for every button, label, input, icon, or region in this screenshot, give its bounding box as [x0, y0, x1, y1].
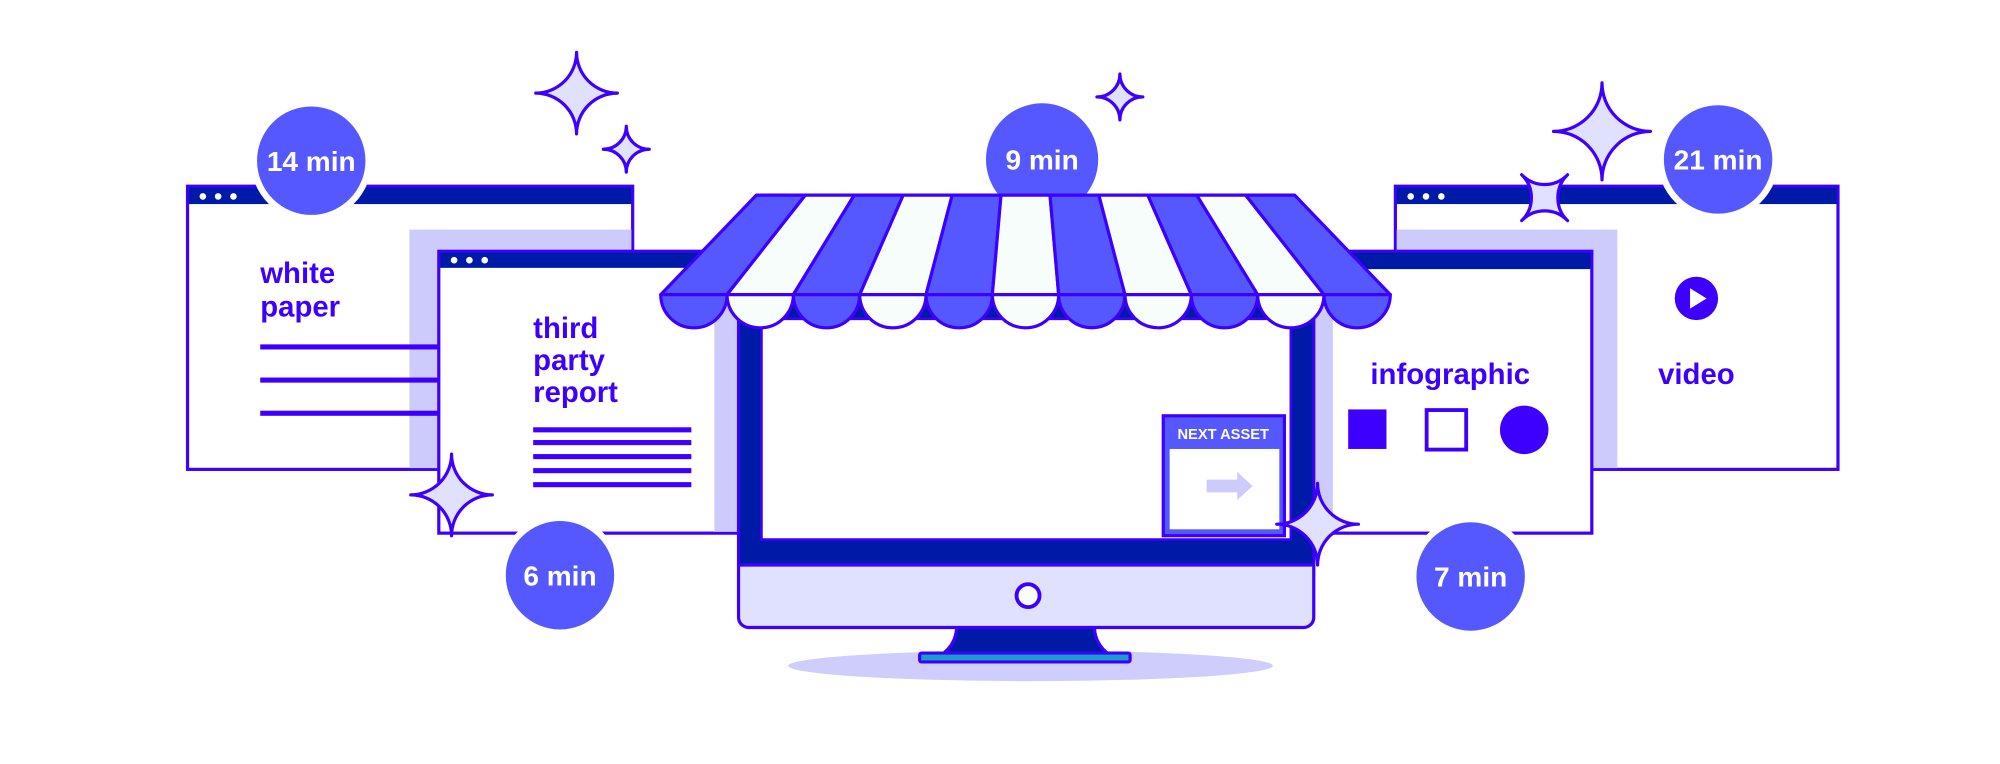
badge: 9 min: 9 min: [1005, 145, 1079, 176]
panel: video window: [1395, 186, 1838, 469]
icon: arrow: [1207, 472, 1253, 500]
panel: third party report window: report: [533, 376, 618, 409]
text: third party report: third: [533, 312, 598, 345]
badge: 21 min: [1661, 102, 1775, 217]
text: infographic: infographic: [1370, 358, 1530, 391]
badge: 7 min: 7 min: [1434, 562, 1507, 593]
awning: [661, 195, 1390, 328]
text: video: video: [1658, 358, 1735, 391]
panel: third party report window: [439, 251, 745, 533]
next asset box: [1163, 416, 1284, 536]
panel: white paper window: [188, 186, 633, 469]
panel: infographic window: [1301, 251, 1592, 533]
monitor: [739, 301, 1314, 662]
badge: 9 min: [986, 103, 1098, 216]
badge: 21 min: 21 min: [1674, 145, 1763, 176]
badge: 14 min: [254, 103, 369, 218]
panel: third party report window: party: [533, 344, 606, 377]
badge: 14 min: 14 min: [267, 146, 356, 177]
panel: white paper window: paper: [260, 290, 340, 323]
sparkles: [411, 52, 1650, 565]
next asset box: NEXT ASSET: [1177, 427, 1269, 443]
badge: 7 min: [1413, 519, 1528, 634]
text: white paper: white: [259, 257, 335, 290]
shadow: [788, 650, 1273, 681]
badge: 6 min: [503, 518, 617, 633]
badge: 6 min: 6 min: [523, 560, 597, 591]
icon: play: [1675, 277, 1718, 320]
